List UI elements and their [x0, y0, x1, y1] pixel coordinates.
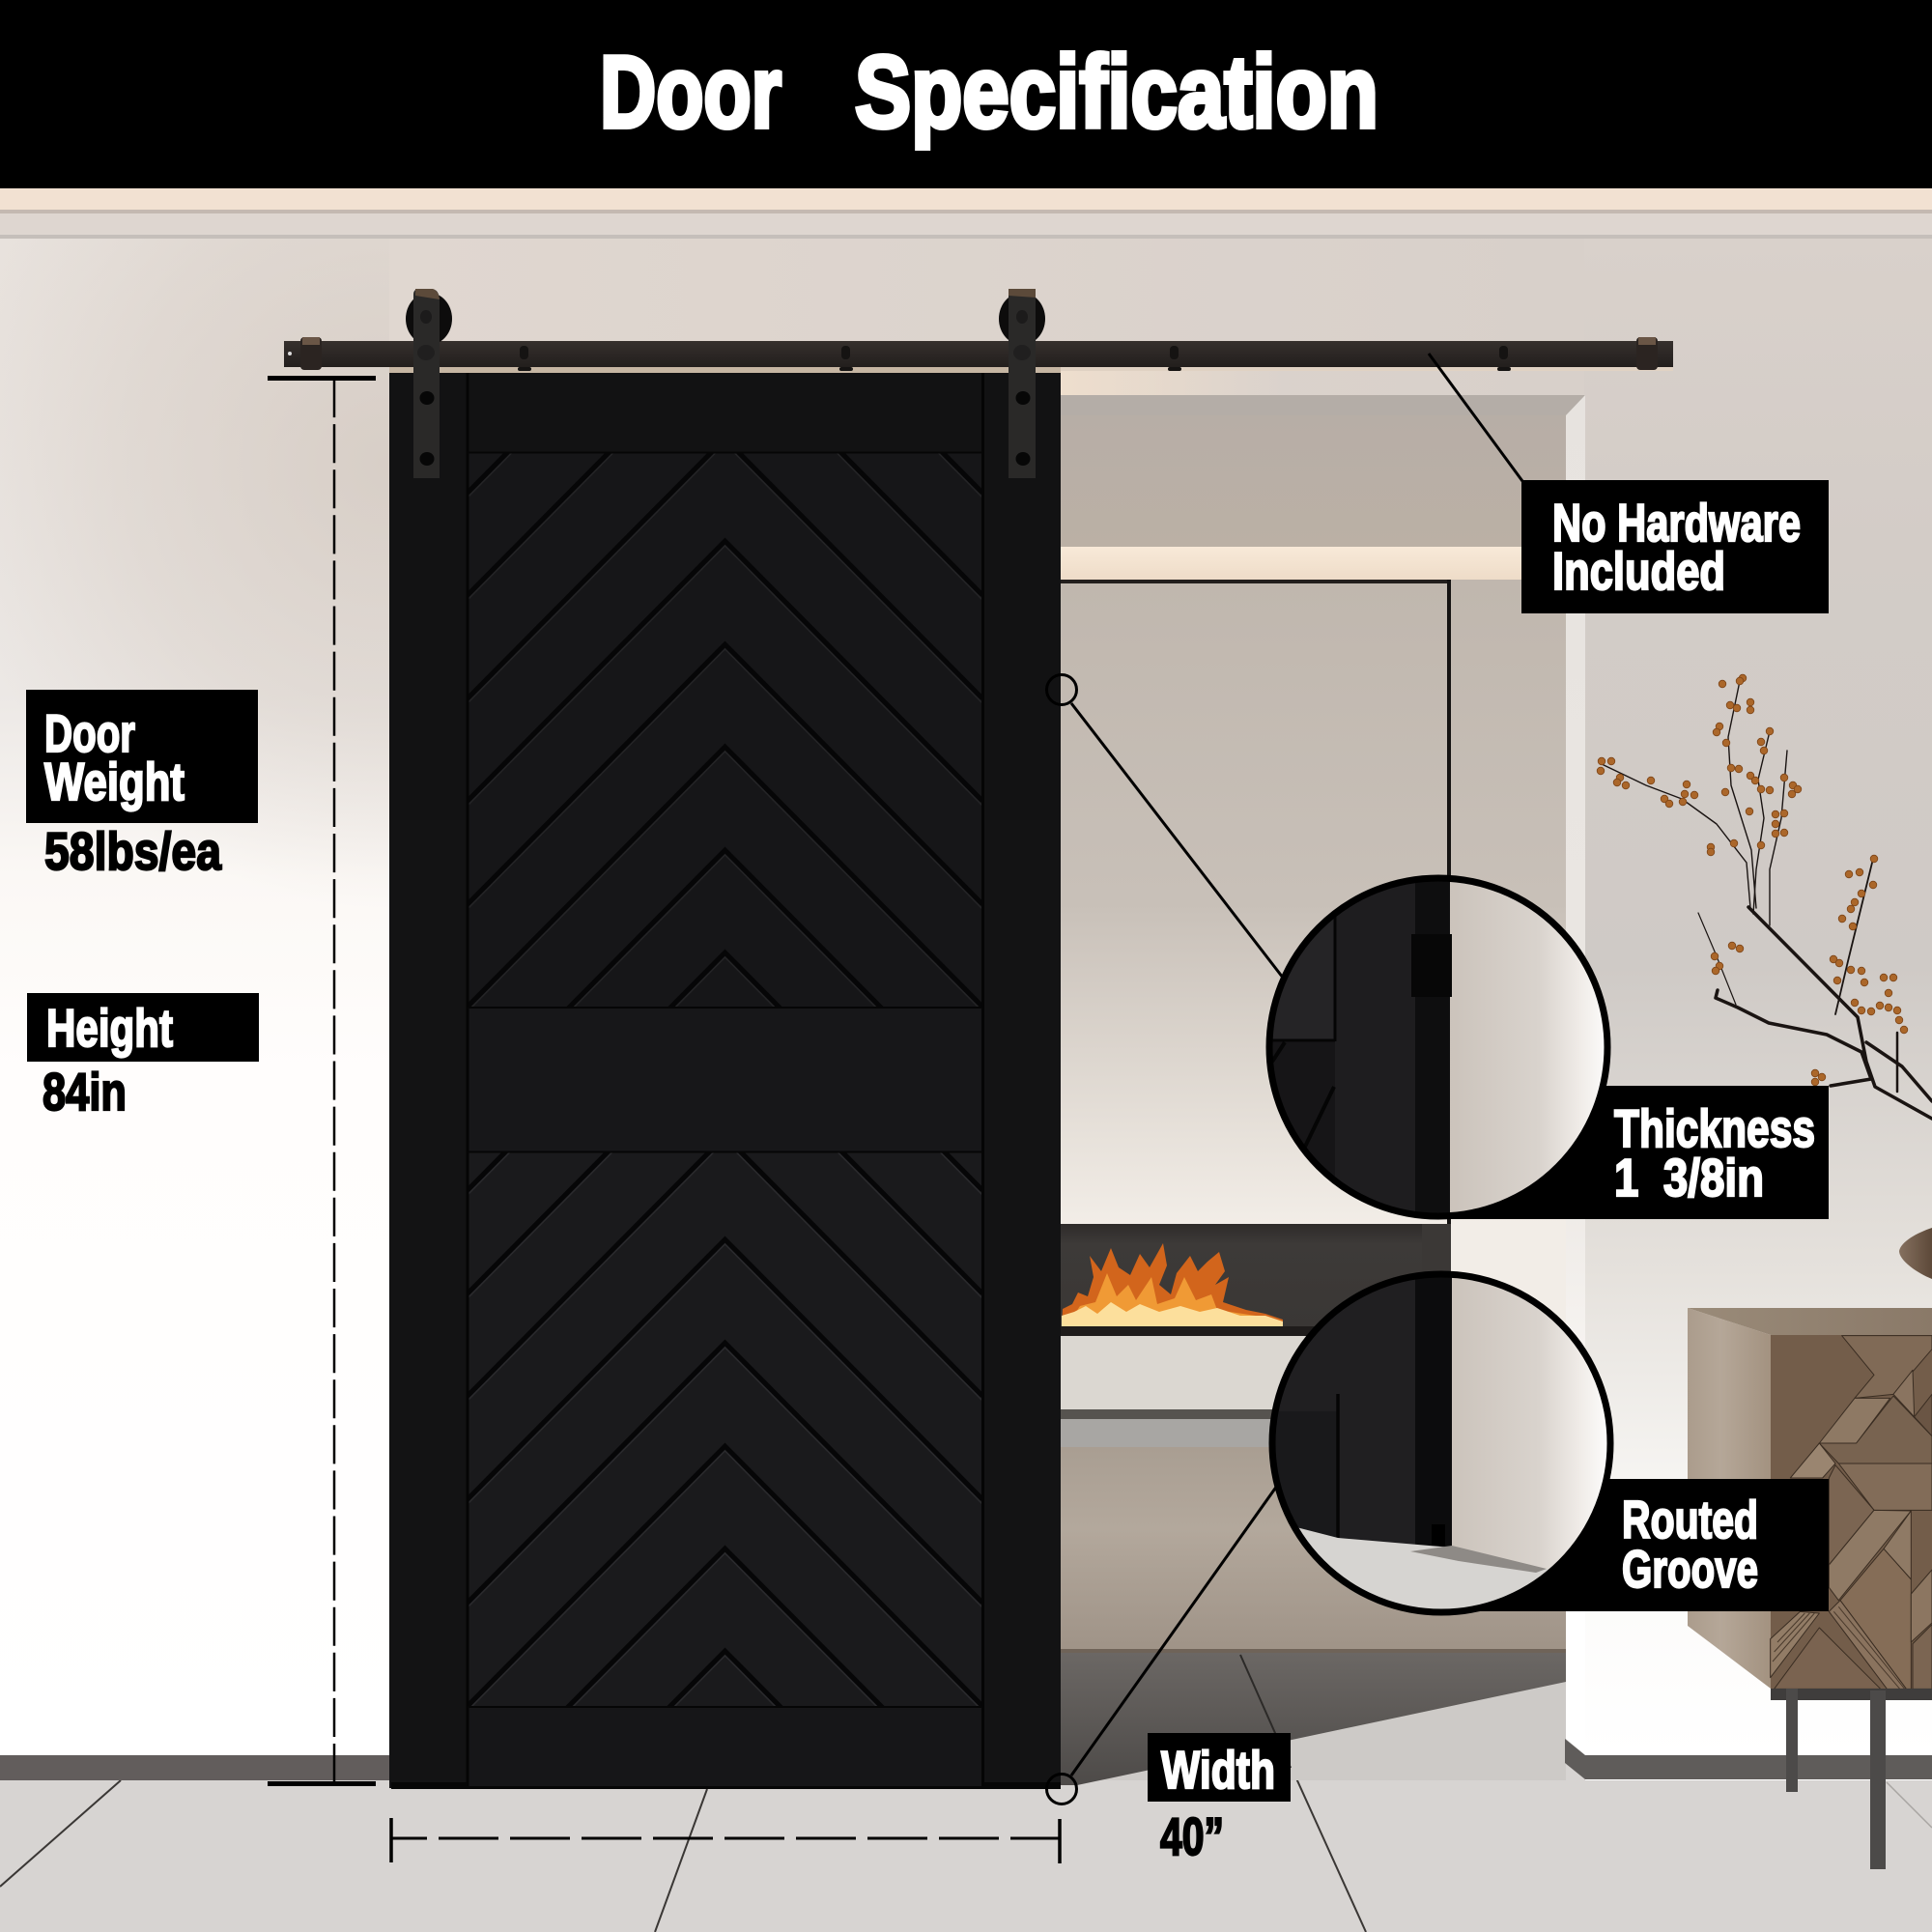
leader: hardware: [1429, 354, 1522, 481]
cabinet: [1688, 1308, 1932, 1869]
width dimension: [391, 1818, 1060, 1863]
rug: [1061, 1447, 1566, 1652]
label: thickness: [1449, 1086, 1829, 1219]
label: door weight: 58lbs/ea: [44, 821, 221, 881]
baseboard: [0, 1739, 1932, 1780]
title: [600, 35, 1378, 149]
cabinet legs: [1771, 1689, 1932, 1869]
marker circle: door foot: [1047, 1774, 1076, 1804]
detail circle: thickness: [1265, 874, 1618, 1223]
label: no hardware included: [1521, 480, 1829, 613]
marker circle: door edge: [1047, 674, 1076, 705]
label: routed groove: Groove: [1622, 1539, 1758, 1599]
title: Door: [600, 35, 781, 149]
branches with berries: [1597, 674, 1932, 1119]
cabinet front pattern: [1771, 1336, 1932, 1689]
label: height: 84in: [43, 1062, 127, 1122]
leader: routed groove: [1071, 1486, 1277, 1776]
label: door weight: Weight: [44, 752, 185, 811]
dark floor in next room: [1061, 1653, 1566, 1785]
label: no hardware included: Included: [1552, 541, 1725, 601]
label: door weight: [26, 690, 258, 881]
label: door weight: Door: [44, 703, 135, 763]
fireplace: [1061, 1224, 1451, 1448]
barn door: [389, 373, 1061, 1789]
height dimension: [268, 376, 376, 1786]
upper chevron panel: [469, 454, 981, 1007]
left hanger: [406, 289, 452, 478]
label: width: 40”: [1160, 1806, 1224, 1866]
label: no hardware included: No Hardware: [1552, 493, 1801, 553]
floor: [0, 1655, 1932, 1932]
title: Specification: [855, 35, 1378, 149]
opening into next room: [1061, 395, 1585, 1785]
lower chevron panel: [469, 1153, 981, 1706]
right hanger: [999, 289, 1045, 478]
label: routed groove: [1449, 1479, 1829, 1611]
rail end stoppers: [288, 337, 1658, 370]
title bar: [0, 0, 1932, 188]
label: routed groove: Routed: [1622, 1490, 1758, 1549]
label: width: [1148, 1733, 1291, 1866]
sliding track hardware: [284, 289, 1673, 478]
label: thickness: Thickness: [1614, 1098, 1815, 1158]
detail circle: routed groove: [1267, 1271, 1618, 1623]
label: height: [27, 993, 259, 1122]
label: thickness: 1 3/8in: [1614, 1148, 1764, 1208]
vase: [1899, 1228, 1932, 1279]
label: width: Width: [1161, 1740, 1275, 1800]
rail bolts: [518, 346, 1511, 371]
label: height: Height: [46, 998, 173, 1058]
flames: [1062, 1243, 1283, 1326]
leader: thickness: [1071, 703, 1283, 978]
door rails: [468, 373, 983, 1786]
track rail: [284, 341, 1673, 367]
